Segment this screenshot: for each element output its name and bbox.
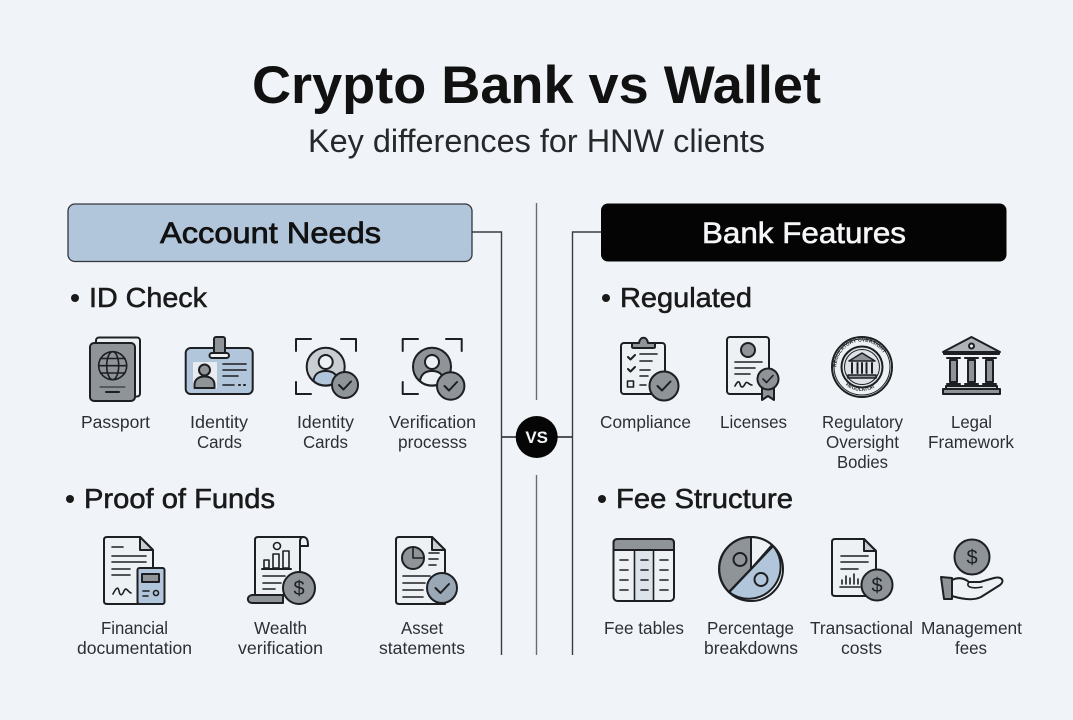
label: Transactional bbox=[810, 618, 913, 638]
icon: verification process bbox=[403, 339, 464, 400]
icon: transactional costs: $ bbox=[871, 575, 883, 597]
label: Framework bbox=[928, 432, 1014, 452]
icon: legal framework bbox=[943, 337, 1000, 394]
label bbox=[389, 412, 476, 452]
label: verification bbox=[238, 638, 323, 658]
label: Asset bbox=[401, 618, 443, 638]
label: documentation bbox=[77, 638, 192, 658]
label: Cards bbox=[303, 432, 348, 452]
connector left bbox=[472, 232, 502, 655]
label: Verification bbox=[389, 412, 476, 432]
label: Wealth bbox=[254, 618, 307, 638]
label bbox=[810, 618, 913, 658]
icon: management fees: $ bbox=[966, 547, 978, 569]
icon: wealth verification: $ bbox=[293, 578, 305, 600]
label: Identity bbox=[297, 412, 354, 432]
label: Passport bbox=[81, 412, 150, 432]
icon: face scan bbox=[296, 339, 358, 398]
label: Management bbox=[921, 618, 1022, 638]
subtitle: Key differences for HNW clients bbox=[308, 123, 765, 159]
label: Regulatory bbox=[822, 412, 903, 432]
icon: identity badge bbox=[186, 337, 253, 394]
label bbox=[77, 618, 192, 658]
label: Licenses bbox=[720, 412, 787, 432]
label: fees bbox=[955, 638, 987, 658]
label: Legal bbox=[951, 412, 992, 432]
icon: licenses bbox=[727, 337, 778, 400]
title: Crypto Bank vs Wallet bbox=[252, 56, 821, 115]
label bbox=[822, 412, 903, 472]
connector right bbox=[572, 232, 601, 655]
label: statements bbox=[379, 638, 465, 658]
icon: regulator seal: REGULATORY OVERSIGHT bbox=[833, 338, 886, 367]
label: Percentage bbox=[707, 618, 794, 638]
label: costs bbox=[841, 638, 882, 658]
icon: transactional costs bbox=[832, 539, 892, 600]
label bbox=[190, 412, 248, 452]
label: Oversight bbox=[826, 432, 899, 452]
icon: percentage breakdown bbox=[719, 537, 783, 601]
label bbox=[379, 618, 465, 658]
section heading: Regulated: Regulated bbox=[620, 282, 752, 313]
label: Identity bbox=[190, 412, 248, 432]
section heading: Proof of Funds: Proof of Funds bbox=[84, 483, 275, 514]
label: Bodies bbox=[837, 452, 888, 472]
icon: passport bbox=[90, 338, 140, 401]
icon: regulator seal bbox=[831, 336, 893, 398]
label bbox=[921, 618, 1022, 658]
icon: fee tables bbox=[614, 539, 674, 601]
central divider and VS badge: VS bbox=[525, 428, 548, 447]
icon: wealth verification bbox=[248, 537, 315, 604]
icon: asset statements bbox=[396, 537, 457, 604]
icon: management fees bbox=[941, 540, 1002, 599]
icon: regulator seal: REGULATOR bbox=[846, 383, 874, 391]
label bbox=[928, 412, 1014, 452]
panel: account needs bbox=[66, 204, 502, 658]
icon: compliance bbox=[621, 338, 678, 400]
label: Compliance bbox=[600, 412, 691, 432]
heading: account needs bbox=[68, 204, 472, 262]
label bbox=[297, 412, 354, 452]
heading: bank features bbox=[601, 204, 1006, 262]
central divider and VS badge bbox=[502, 203, 572, 655]
label bbox=[704, 618, 798, 658]
heading: bank features: Bank Features bbox=[702, 217, 906, 250]
label: Financial bbox=[101, 618, 168, 638]
section heading: ID Check: ID Check bbox=[89, 282, 207, 313]
icon: financial documentation bbox=[104, 537, 164, 604]
label bbox=[238, 618, 323, 658]
label: Fee tables bbox=[604, 618, 684, 638]
label: processs bbox=[398, 432, 467, 452]
heading: account needs: Account Needs bbox=[160, 217, 381, 250]
panel: bank features bbox=[572, 204, 1022, 658]
label: breakdowns bbox=[704, 638, 798, 658]
section heading: Fee Structure: Fee Structure bbox=[616, 483, 793, 514]
label: Cards bbox=[197, 432, 242, 452]
